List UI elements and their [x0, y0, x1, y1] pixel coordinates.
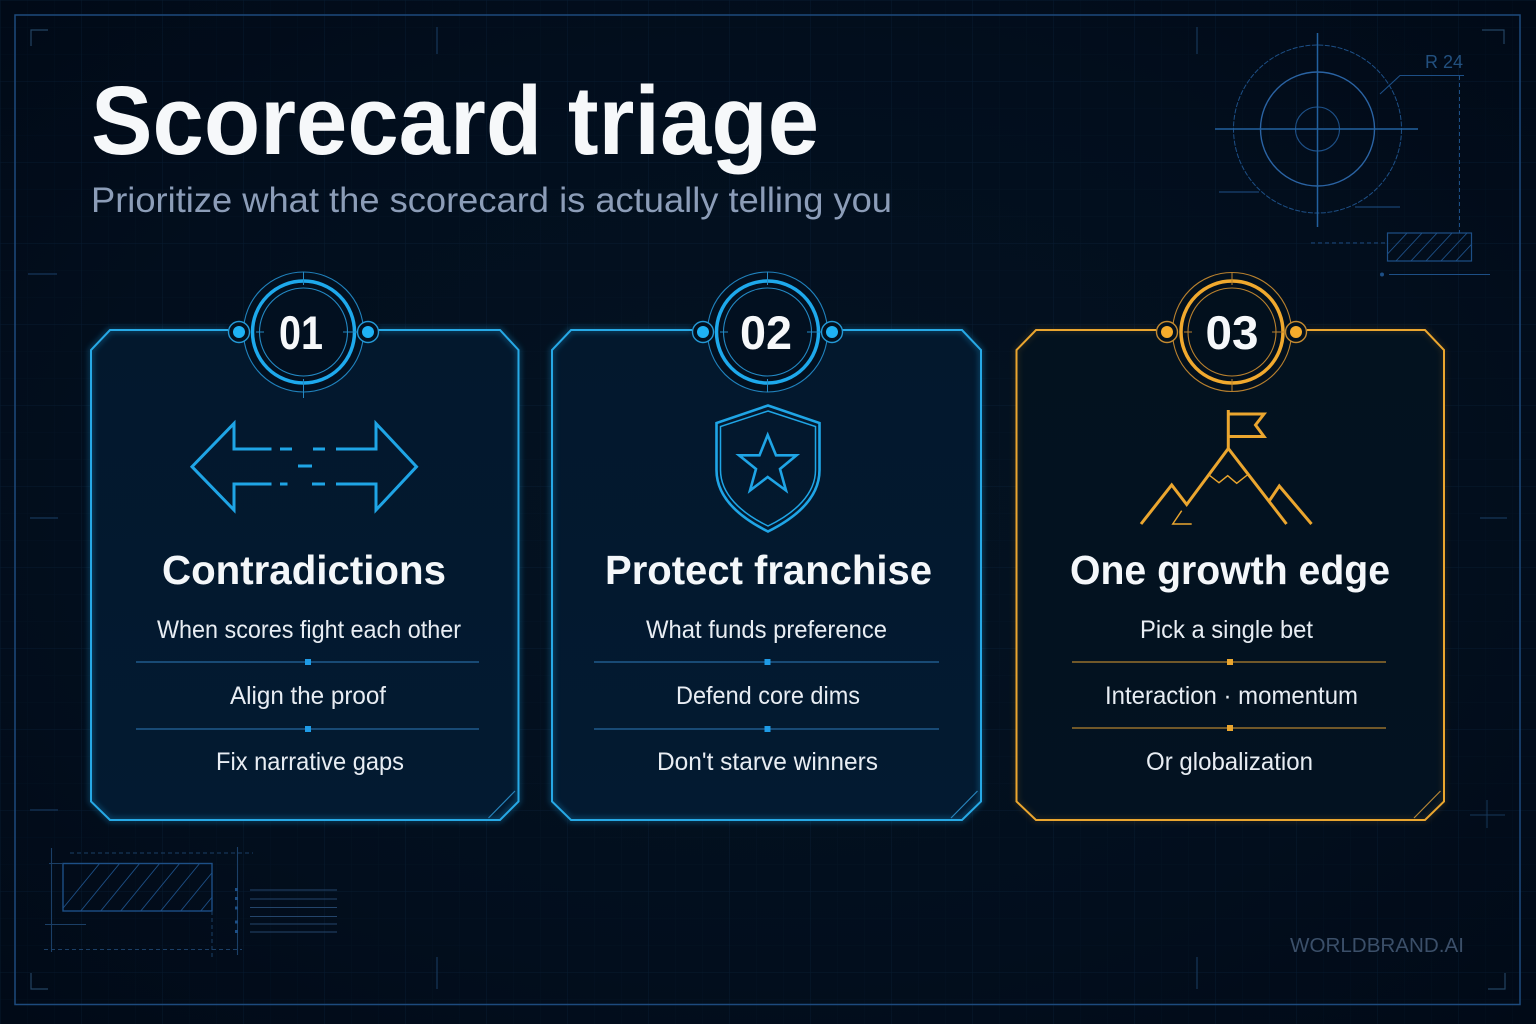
- number badge 02: [692, 272, 842, 392]
- icon: shield with star: [716, 406, 820, 532]
- heading: One growth edge: [1070, 547, 1390, 593]
- text: line 1: What funds preference: [646, 616, 887, 644]
- divider: [594, 659, 939, 665]
- divider: [136, 726, 479, 732]
- text: line 3: Fix narrative gaps: [216, 748, 404, 776]
- panel: one growth edge: [1016, 272, 1444, 820]
- number badge 01: 01: [279, 306, 323, 359]
- heading: Protect franchise: [605, 547, 932, 593]
- text: line 1: Pick a single bet: [1140, 616, 1313, 644]
- heading: Contradictions: [162, 547, 446, 593]
- icon: opposing arrows: [192, 424, 416, 510]
- divider: [1072, 659, 1386, 665]
- number badge 03: 03: [1206, 306, 1258, 359]
- number badge 03: [1156, 272, 1306, 392]
- title: Scorecard triage: [91, 66, 819, 175]
- subtitle: Prioritize what the scorecard is actually telling you: [91, 181, 892, 220]
- panel: contradictions: [91, 272, 518, 820]
- divider: [1072, 725, 1386, 731]
- text: line 3: Or globalization: [1146, 748, 1313, 776]
- icon: mountain with flag: [1141, 410, 1312, 524]
- dimension label: R 24: [1425, 52, 1463, 72]
- text: line 2: Interaction · momentum: [1105, 682, 1358, 710]
- number badge 01: [228, 272, 378, 398]
- blueprint drawing: lower left hatch block: [44, 847, 337, 957]
- blueprint drawing: top right target: [1215, 33, 1490, 276]
- number badge 02: 02: [740, 306, 792, 359]
- text: line 2: Defend core dims: [676, 682, 860, 710]
- brand mark: WORLDBRAND.AI: [1290, 935, 1464, 957]
- text: line 3: Don't starve winners: [657, 748, 878, 776]
- divider: [594, 726, 939, 732]
- text: line 2: Align the proof: [230, 682, 386, 710]
- divider: [136, 659, 479, 665]
- panel: protect franchise: [552, 272, 981, 820]
- text: line 1: When scores fight each other: [157, 616, 461, 644]
